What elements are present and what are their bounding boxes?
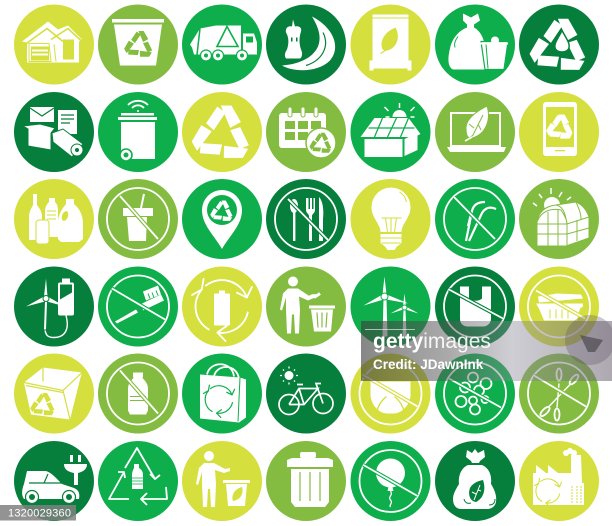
icon: person using compost bin bbox=[182, 441, 262, 521]
icon: recycle with water drop bbox=[519, 4, 599, 84]
icon: smartphone with recycle bbox=[519, 92, 599, 172]
icon: no disposable diaper bbox=[350, 354, 430, 434]
icon: bottle recycling triangle bbox=[98, 441, 178, 521]
icon: greenhouse with sun bbox=[519, 179, 599, 259]
icon: recycling bin bbox=[98, 4, 178, 84]
icon: factory with recycling loop bbox=[519, 441, 599, 521]
icon: no plastic cutlery bbox=[266, 179, 346, 259]
icon: battery recycling loop bbox=[182, 266, 262, 346]
icon: solar panel house bbox=[350, 92, 430, 172]
watermark wordmark: gettyimages bbox=[373, 330, 491, 353]
icon: no plastic cup bbox=[98, 179, 178, 259]
watermark credit: Credit: JDawnInk bbox=[373, 357, 484, 372]
icon: laptop with leaf bbox=[435, 92, 515, 172]
icon: apple core and banana bbox=[266, 4, 346, 84]
icon: recycling symbol bbox=[182, 92, 262, 172]
icon: electric car with plug bbox=[14, 441, 94, 521]
icon: recycled shopping bag bbox=[182, 354, 262, 434]
image id tag bbox=[0, 505, 76, 520]
icon: smart bin with wifi bbox=[98, 92, 178, 172]
icon: wind turbines bbox=[350, 266, 430, 346]
icon: no plastic bottle bbox=[98, 354, 178, 434]
icon: no plastic straws bbox=[435, 179, 515, 259]
icon: no plastic toothbrush bbox=[98, 266, 178, 346]
icon: compost bin with leaf bbox=[350, 4, 430, 84]
icon: cardboard recycling box bbox=[14, 354, 94, 434]
icon: LED light bulb bbox=[350, 179, 430, 259]
icon: trash can bbox=[266, 441, 346, 521]
icon: no plastic cotton buds bbox=[519, 354, 599, 434]
image id tag: 1320029360 bbox=[8, 508, 71, 520]
icon: no plastic microbeads bbox=[435, 354, 515, 434]
icon: house with garage bbox=[14, 4, 94, 84]
icon: bicycle and sun bbox=[266, 354, 346, 434]
icon: no plastic bag bbox=[435, 266, 515, 346]
icon: recycling truck bbox=[182, 4, 262, 84]
icon: calendar with recycle bbox=[266, 92, 346, 172]
icon: person throwing rubbish in bin bbox=[266, 266, 346, 346]
icon: recycling location pin bbox=[182, 179, 262, 259]
watermark band bbox=[361, 315, 612, 381]
icon: garbage bag and bucket bbox=[435, 4, 515, 84]
icon: compost bag with leaf bbox=[435, 441, 515, 521]
icon: paper, boxes and packaging bbox=[14, 92, 94, 172]
icon: no balloon bbox=[350, 441, 430, 521]
icon: wind turbine charging battery bbox=[14, 266, 94, 346]
icon: no plastic food container bbox=[519, 266, 599, 346]
icon: bottles and jug bbox=[14, 179, 94, 259]
